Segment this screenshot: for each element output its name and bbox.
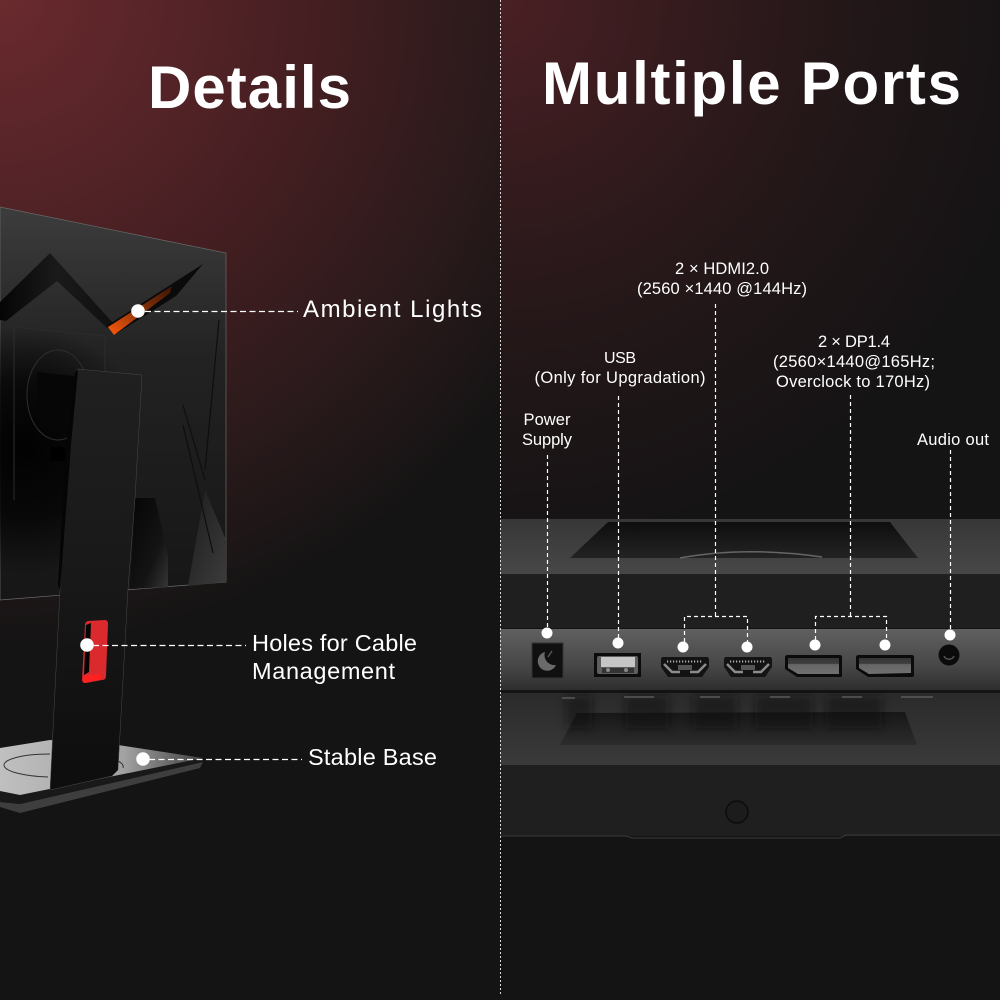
callout: power supply <box>522 411 573 638</box>
panel: ports background <box>500 0 1000 1000</box>
HDMI port 2 <box>724 657 772 677</box>
callout: holes for cable management: Management <box>252 658 395 684</box>
screw <box>726 801 748 823</box>
callout: USB: (Only for Upgradation) <box>534 369 706 387</box>
silkscreen port labels <box>562 696 933 699</box>
lower recess <box>560 712 917 745</box>
HDMI port 1 <box>661 657 709 677</box>
right side fin lines <box>183 320 219 553</box>
callout: ambient lights: Ambient Lights <box>303 296 482 323</box>
USB port <box>594 653 641 677</box>
callout: holes for cable management <box>80 630 417 684</box>
port strip <box>500 629 1000 690</box>
base ring <box>4 754 123 777</box>
side vent shadow <box>130 498 168 589</box>
lower housing <box>500 693 1000 765</box>
title: Details: Details <box>148 54 351 121</box>
base plate <box>0 740 203 795</box>
stand left edge <box>58 370 78 590</box>
callout: DisplayPort: (2560×1440@165Hz; <box>773 353 935 371</box>
callout: USB <box>534 350 706 648</box>
base front edge <box>0 757 203 804</box>
callout: power supply: Supply <box>522 431 573 449</box>
height-adjust stand <box>50 369 142 790</box>
callout: power supply: Power <box>524 411 571 429</box>
illustration: monitor port panel <box>500 519 1000 838</box>
callout: DisplayPort: 2 × DP1.4 <box>818 333 890 351</box>
ambient light strip <box>108 264 203 335</box>
VESA mount recess <box>14 327 105 500</box>
port label shadows <box>566 696 882 728</box>
left shadow <box>0 320 130 600</box>
callout: DisplayPort: Overclock to 170Hz) <box>776 373 930 391</box>
callout: stable base: Stable Base <box>308 744 437 770</box>
audio jack <box>938 644 960 666</box>
callout: HDMI: 2 × HDMI2.0 <box>675 260 769 278</box>
panel: details background <box>0 0 500 1000</box>
dark band <box>500 574 1000 628</box>
recess highlight <box>680 552 822 558</box>
bottom edge line <box>500 835 1000 838</box>
callout: HDMI: (2560 ×1440 @144Hz) <box>637 280 807 298</box>
callout: holes for cable management: Holes for Cable <box>252 630 417 656</box>
lower right facet <box>188 490 226 586</box>
base plate thickness <box>0 762 203 813</box>
monitor back shell <box>0 207 226 600</box>
power jack <box>532 643 563 678</box>
DisplayPort 2 <box>856 655 914 677</box>
red cable management hole <box>82 620 108 683</box>
seam <box>500 690 1000 693</box>
upper housing <box>500 519 1000 574</box>
callout: audio out: Audio out <box>917 431 989 449</box>
callout: stable base <box>136 744 437 770</box>
upper recess <box>570 522 918 558</box>
callout: ambient lights <box>131 296 482 323</box>
bottom band <box>500 765 1000 836</box>
callout: USB: USB <box>604 350 636 367</box>
title: Multiple Ports: Multiple Ports <box>542 50 961 117</box>
callout: HDMI <box>637 260 807 652</box>
DisplayPort 1 <box>785 655 842 677</box>
monitor V-shaped rear vent <box>0 253 113 328</box>
callout: audio out <box>917 431 989 640</box>
illustration: monitor rear with stand and base <box>0 207 226 813</box>
callout: DisplayPort <box>773 333 935 650</box>
